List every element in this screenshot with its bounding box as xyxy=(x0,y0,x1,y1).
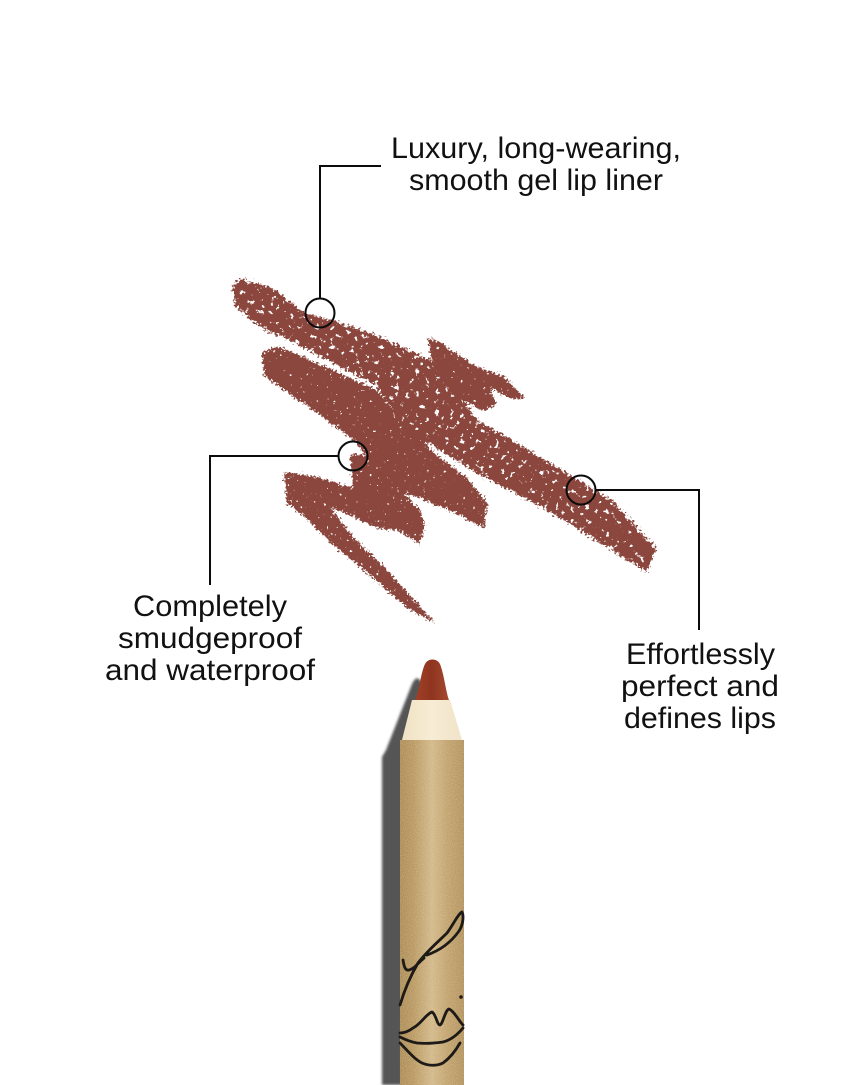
callout text right xyxy=(621,638,779,735)
pencil shadow xyxy=(382,678,428,1085)
swatch stroke: short upper right stroke xyxy=(428,338,525,411)
leader line left xyxy=(210,456,338,585)
pencil lead tip xyxy=(415,660,449,700)
callout: top xyxy=(306,132,681,328)
leader line top xyxy=(320,166,381,299)
callout text left: Completely xyxy=(133,590,287,623)
callout text top: smooth gel lip liner xyxy=(409,164,663,197)
swatch stroke: lower zigzag stroke xyxy=(284,455,435,623)
lip liner swatch xyxy=(232,279,656,623)
callout text left xyxy=(105,590,316,687)
callout text right: defines lips xyxy=(624,702,776,735)
pencil gold barrel xyxy=(400,740,464,1085)
leader line right xyxy=(596,490,699,630)
swatch stroke: second long stroke xyxy=(262,346,487,528)
pencil script logo xyxy=(400,912,463,1065)
lip liner pencil xyxy=(400,660,464,1085)
callout text top xyxy=(391,132,681,197)
callout: left xyxy=(105,442,368,687)
callout text left: smudgeproof xyxy=(118,622,303,655)
callout: right xyxy=(566,476,779,735)
marker circle left xyxy=(338,442,368,470)
callout text top: Luxury, long-wearing, xyxy=(391,132,681,165)
pencil wood xyxy=(402,700,462,740)
marker circle right xyxy=(566,476,596,504)
callout text right: Effortlessly xyxy=(626,638,775,671)
callout text left: and waterproof xyxy=(105,654,316,687)
swatch stroke: upper long stroke xyxy=(232,279,656,572)
marker circle top xyxy=(306,298,334,328)
callout text right: perfect and xyxy=(621,670,779,703)
